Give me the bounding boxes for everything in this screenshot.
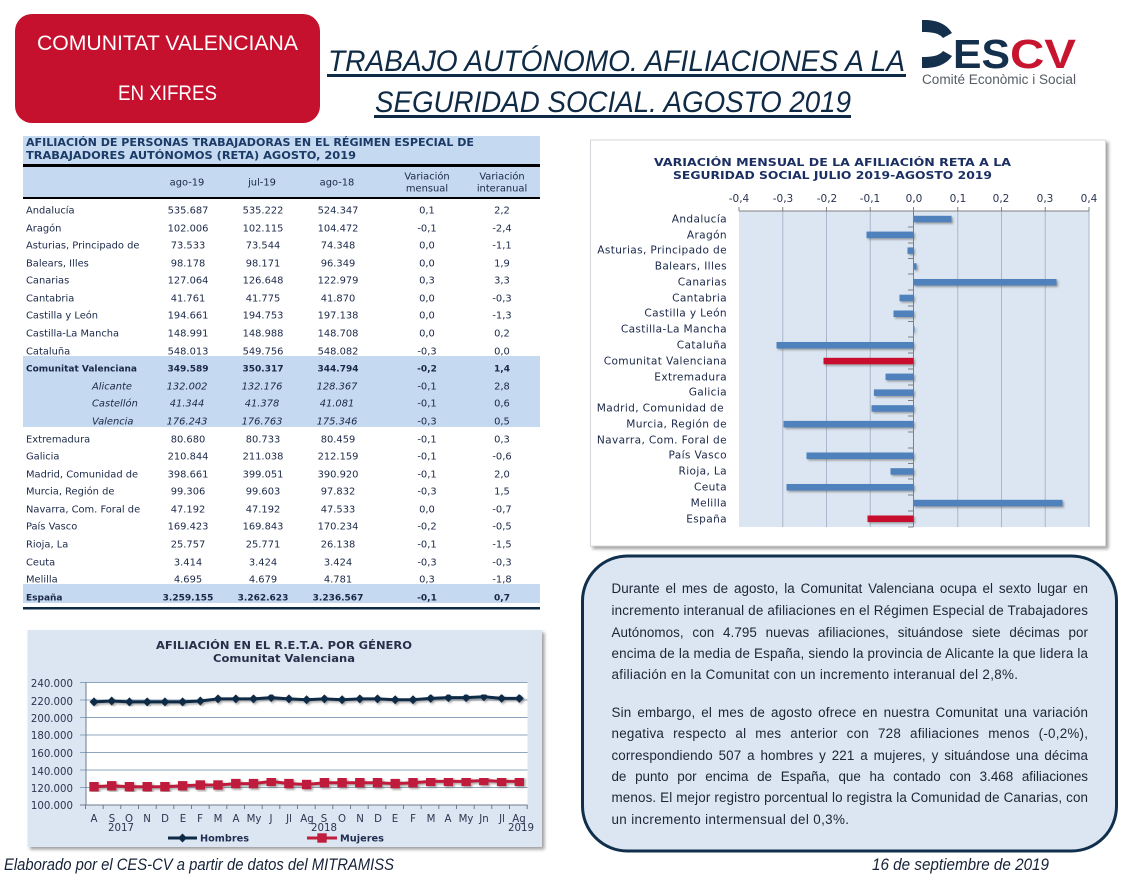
line chart plot and axes: D: [374, 814, 382, 825]
row: Castilla y León: 194.661: [168, 310, 208, 322]
row: Alicante: 2,8: [494, 382, 510, 392]
row: Rioja: 26.138: [321, 540, 355, 550]
row: Galicia: Galicia: [26, 452, 59, 462]
row: Andalucía: 535.222: [243, 206, 283, 216]
title: TRABAJO AUTÓNOMO. AFILIACIONES A LA: [328, 45, 905, 78]
row: España: [26, 594, 510, 604]
row: Valencia: [92, 416, 510, 428]
row: Navarra: 47.533: [321, 504, 355, 516]
row: Balears: 98.178: [171, 258, 205, 270]
row: Ceuta: 3.414: [174, 558, 202, 568]
bar chart axis and plot area: 0,2: [993, 193, 1009, 205]
row: Castellón: 41.378: [245, 398, 279, 410]
bar chart category labels: Melilla: [691, 498, 727, 510]
paragraph 2: de punto por encima de España, que ha contado con 3.468 afiliaciones: [612, 769, 1088, 784]
panel: line chart by gender: [28, 630, 542, 847]
row: Cantabria: [26, 294, 512, 304]
line chart plot and axes: Jn: [478, 814, 489, 825]
paragraph 2: menos. El mejor registro porcentual lo registra la Comunidad de Canarias, con: [612, 790, 1088, 805]
panel: monthly variation bar chart: [590, 140, 1106, 546]
row: Castellón: -0,1: [417, 398, 437, 410]
row: Castellón: 0,6: [494, 398, 510, 410]
paragraph 1: Autónomos, con 4.795 nuevas afiliaciones, situándose siete décimas por: [612, 625, 1089, 640]
logo: CES-CV: ES: [953, 31, 1010, 77]
row: Balears: Balears, Illes: [26, 258, 89, 270]
footer: source: Elaborado por el CES-CV a partir de datos del MITRAMISS: [4, 856, 394, 874]
line chart plot and axes: J: [268, 814, 273, 825]
title: [327, 45, 906, 119]
row: Galicia: [26, 452, 512, 462]
bar chart category labels: Extremadura: [654, 372, 727, 384]
row: Andalucía: 2,2: [494, 206, 510, 216]
row: Galicia: 210.844: [168, 452, 208, 462]
logo: CES-CV: CV: [1010, 31, 1077, 77]
bar chart axis and plot area: -0,4: [729, 193, 750, 205]
line chart plot and axes: My: [459, 814, 473, 825]
table column headers: jul-19: [247, 178, 276, 188]
row: Cataluña: 548.082: [318, 346, 358, 358]
row: Cantabria: Cantabria: [26, 294, 74, 304]
bar chart category labels: Andalucía: [672, 214, 727, 226]
row: País Vasco: 169.423: [168, 522, 208, 532]
row: Cataluña: 548.013: [168, 346, 208, 358]
row: Murcia: -0,3: [417, 486, 437, 498]
row: Rioja: [26, 540, 512, 550]
bar chart category labels: Navarra, Com. Foral de: [597, 434, 727, 446]
row: Extremadura: [26, 434, 510, 446]
table heading: [23, 136, 540, 167]
row: País Vasco: -0,2: [417, 522, 437, 532]
row: España: -0,1: [417, 594, 437, 604]
row: Castilla y León: [26, 310, 512, 322]
line chart plot and axes: M: [427, 814, 435, 825]
line chart plot and axes: 180.000: [31, 731, 73, 742]
row: Murcia: Murcia, Región de: [26, 486, 114, 498]
line chart plot and axes: S: [109, 814, 115, 825]
row: Castilla-La Mancha: 0,0: [419, 328, 435, 340]
row: País Vasco: [26, 520, 512, 532]
row: Alicante: [91, 382, 510, 392]
row: Asturias: 0,0: [419, 240, 435, 252]
row: Ceuta: [26, 558, 512, 568]
row: Andalucía: [26, 204, 510, 216]
row: Canarias: 127.064: [168, 276, 208, 286]
row: Comunitat Valenciana: 344.794: [318, 364, 358, 374]
row: Castilla y León: 197.138: [318, 310, 358, 322]
table column headers: Variación: [404, 170, 450, 182]
row: Ceuta: Ceuta: [26, 558, 55, 568]
bars highlighted: Comunitat Valenciana and España: [824, 358, 914, 522]
row: Asturias: -1,1: [492, 240, 512, 252]
bar chart category labels: Galicia: [689, 386, 727, 398]
row: Melilla: Melilla: [26, 574, 58, 586]
row: Cantabria: 41.775: [246, 294, 280, 304]
row: Melilla: 4.695: [174, 574, 202, 586]
row: Valencia: 175.346: [317, 416, 357, 428]
row: Ceuta: 3.424: [324, 558, 352, 568]
line chart plot and axes: My: [247, 814, 261, 825]
row: Melilla: [26, 574, 512, 586]
row: Rioja: 25.771: [246, 540, 280, 550]
row: Valencia: 176.243: [167, 416, 207, 428]
row: Comunitat Valenciana: 349.589: [168, 364, 208, 374]
row: Extremadura: 0,3: [494, 434, 510, 446]
row: Cantabria: 41.761: [171, 294, 205, 304]
series: Hombres: [94, 697, 519, 702]
row: Andalucía: 0,1: [419, 206, 435, 216]
row: Murcia: 99.306: [171, 486, 205, 498]
row: Murcia: 1,5: [494, 486, 510, 498]
row: Melilla: 0,3: [419, 574, 435, 586]
red badge: Comunitat Valenciana en xifres: COMUNITAT VALENCIANA: [37, 32, 298, 55]
row: Rioja: -0,1: [417, 540, 437, 550]
row: Asturias: 74.348: [321, 240, 355, 252]
row: Castellón: 41.081: [320, 398, 354, 410]
row: Murcia: 97.832: [321, 486, 355, 498]
line chart plot and axes: 200.000: [31, 714, 73, 725]
row: Galicia: 212.159: [318, 452, 358, 462]
row: Melilla: 4.781: [324, 574, 352, 586]
line chart title: AFILIACIÓN EN EL R.E.T.A. POR GÉNERO: [156, 639, 412, 652]
bar chart axis and plot area: -0,2: [817, 193, 837, 205]
line chart plot and axes: F: [410, 814, 416, 825]
logo: CES-CV: [922, 20, 1077, 87]
row: Navarra: 47.192: [171, 504, 205, 516]
row: Cataluña: Cataluña: [26, 346, 70, 358]
row: Valencia: 176.763: [242, 416, 282, 428]
row: Aragón: 102.006: [168, 224, 208, 234]
line chart plot and axes: O: [338, 814, 346, 825]
row: Murcia: [26, 486, 510, 498]
bar chart axis and plot area: [729, 193, 1098, 527]
bar chart title: VARIACIÓN MENSUAL DE LA AFILIACIÓN RETA A LA: [654, 156, 1012, 169]
row: Comunitat Valenciana: Comunitat Valenciana: [26, 364, 137, 374]
bar chart axis and plot area: 0,0: [906, 193, 922, 205]
bar chart category labels: País Vasco: [669, 450, 727, 462]
paragraph 1: afiliación en la Comunitat con un incremento interanual del 2,8%.: [612, 667, 1018, 682]
row: Cataluña: [26, 346, 510, 358]
row: País Vasco: -0,5: [492, 522, 512, 532]
row: Castilla-La Mancha: 0,2: [494, 328, 510, 340]
line chart plot and axes: Jl: [498, 814, 505, 825]
line chart title: Comunitat Valenciana: [213, 653, 355, 665]
row: Castellón: 41.344: [170, 398, 204, 410]
line chart plot and axes: D: [161, 814, 169, 825]
bar chart title: [654, 156, 1012, 182]
row: Valencia: -0,3: [417, 416, 437, 428]
red badge: Comunitat Valenciana en xifres: EN XIFRES: [118, 82, 217, 105]
row: Castilla y León: Castilla y León: [26, 310, 98, 322]
bar chart category labels: Rioja, La: [678, 466, 727, 478]
line chart plot and axes: 2019: [508, 823, 534, 834]
row: Madrid: 398.661: [168, 470, 208, 480]
bar chart category labels: Castilla-La Mancha: [621, 324, 727, 336]
row: Navarra: 47.192: [246, 504, 280, 516]
row: Navarra: Navarra, Com. Foral de: [26, 504, 140, 516]
bar chart category labels: Asturias, Principado de: [597, 244, 727, 256]
row: Castilla-La Mancha: 148.991: [168, 328, 208, 340]
row: España: 3.262.623: [238, 594, 288, 604]
row: Balears: 98.171: [246, 258, 280, 270]
table heading: TRABAJADORES AUTÓNOMOS (RETA) AGOSTO, 2019: [26, 149, 356, 162]
title: SEGURIDAD SOCIAL. AGOSTO 2019: [375, 86, 851, 119]
row: Andalucía: 535.687: [168, 206, 208, 216]
row: Ceuta: -0,3: [417, 558, 437, 568]
bar chart category labels: Cataluña: [677, 340, 727, 352]
row: Comunitat Valenciana: -0,2: [417, 364, 437, 374]
row: Castellón: [92, 398, 510, 410]
row: Madrid: Madrid, Comunidad de: [26, 470, 138, 480]
row: Alicante: 128.367: [317, 382, 358, 392]
row: Ceuta: -0,3: [492, 558, 512, 568]
row: Balears: 96.349: [321, 258, 355, 270]
line chart plot and axes: A: [91, 814, 98, 825]
row: Cantabria: 0,0: [419, 294, 435, 304]
row: Asturias: 73.533: [171, 240, 205, 252]
row: Balears: 0,0: [419, 258, 435, 270]
line chart plot and axes: O: [125, 814, 133, 825]
row: Castilla y León: 0,0: [419, 310, 435, 322]
row: España: 0,7: [494, 594, 510, 604]
paragraph 1: incremento interanual de afiliaciones en el Régimen Especial de Trabajadores: [612, 603, 1088, 618]
row: Extremadura: Extremadura: [26, 434, 90, 446]
line chart plot and axes: N: [143, 814, 151, 825]
row: País Vasco: 170.234: [318, 522, 358, 532]
bar chart category labels: Ceuta: [694, 482, 727, 494]
row: Balears: [26, 258, 510, 270]
bar chart category labels: Madrid, Comunidad de: [597, 402, 724, 414]
paragraph 2: correspondiendo 507 a hombres y 221 a mujeres, y situándose una décima: [612, 748, 1089, 763]
paragraph 2: un incremento intermensual del 0,3%.: [612, 812, 849, 827]
bar chart axis and plot area: -0,1: [860, 193, 880, 205]
row: España: 3.259.155: [163, 594, 213, 604]
row: Madrid: 2,0: [494, 470, 510, 480]
row: País Vasco: País Vasco: [26, 520, 77, 532]
paragraph 2: negativa respecto al mes anterior con 728 afiliaciones menos (-0,2%),: [612, 726, 1088, 741]
table column headers: ago-18: [320, 178, 354, 188]
row: Alicante: 132.002: [167, 382, 207, 392]
line chart plot and axes: F: [197, 814, 203, 825]
line chart plot and axes: S: [321, 814, 327, 825]
row: Valencia: 0,5: [494, 416, 510, 428]
row: Castilla y León: -1,3: [492, 310, 512, 322]
row: Navarra: [26, 504, 512, 516]
row: Castilla-La Mancha: Castilla-La Mancha: [26, 328, 119, 340]
row: Canarias: 122.979: [318, 276, 358, 286]
line chart plot and axes: Ag: [512, 814, 526, 825]
line chart plot and axes: 100.000: [31, 801, 73, 812]
row: Rioja: 25.757: [171, 540, 205, 550]
row: Valencia: Valencia: [92, 416, 133, 428]
bar chart axis and plot area: 0,1: [950, 193, 966, 205]
line chart plot and axes: N: [356, 814, 364, 825]
table heading: AFILIACIÓN DE PERSONAS TRABAJADORAS EN EL RÉGIMEN ESPECIAL DE: [26, 136, 474, 149]
line chart plot and axes: E: [180, 814, 186, 825]
line chart plot and axes: [31, 679, 534, 834]
row: Comunitat Valenciana: 1,4: [494, 364, 510, 374]
bar chart category labels: Castilla y León: [644, 308, 727, 320]
row: Extremadura: 80.733: [246, 434, 280, 446]
paragraph 2: Sin embargo, el mes de agosto ofrece en nuestra Comunitat una variación: [612, 705, 1088, 720]
table column headers: ago-19: [170, 178, 204, 188]
bar chart category labels: [597, 214, 727, 526]
row: Canarias: 3,3: [494, 276, 510, 286]
bar chart category labels: Aragón: [687, 230, 727, 242]
panel: commentary text: [582, 556, 1116, 851]
row: Canarias: 0,3: [419, 276, 435, 286]
paragraph 2: [612, 705, 1089, 827]
row: Murcia: 99.603: [246, 486, 280, 498]
line chart plot and axes: A: [445, 814, 452, 825]
row: Extremadura: 80.459: [321, 434, 355, 446]
bar chart axis and plot area: 0,4: [1081, 193, 1098, 205]
row: Alicante: 132.176: [242, 382, 282, 392]
row: Canarias: 126.648: [243, 276, 283, 286]
row: Cantabria: 41.870: [321, 294, 355, 304]
line chart plot and axes: 220.000: [31, 697, 73, 708]
line chart title: [156, 639, 412, 665]
row: Castilla-La Mancha: [26, 328, 510, 340]
row: Rioja: Rioja, La: [26, 540, 68, 550]
line chart plot and axes: 240.000: [31, 679, 73, 690]
row: País Vasco: 169.843: [243, 522, 283, 532]
row: Madrid: -0,1: [417, 470, 437, 480]
row: Castilla-La Mancha: 148.708: [318, 328, 358, 340]
row: España: 3.236.567: [313, 594, 363, 604]
legend: Mujeres: [340, 834, 384, 844]
line chart plot and axes: 120.000: [31, 784, 73, 795]
line chart plot and axes: A: [233, 814, 240, 825]
row: Castilla y León: 194.753: [243, 310, 283, 322]
paragraph 1: Durante el mes de agosto, la Comunitat Valenciana ocupa el sexto lugar en: [612, 581, 1088, 596]
row: Melilla: 4.679: [249, 574, 277, 586]
row: Aragón: [26, 222, 512, 234]
series: Mujeres: [94, 780, 519, 787]
bar chart category labels: Comunitat Valenciana: [604, 356, 727, 368]
row: Madrid: 390.920: [318, 470, 358, 480]
row: Canarias: [26, 276, 510, 286]
bar chart axis and plot area: -0,3: [773, 193, 793, 205]
row: Asturias: [26, 240, 512, 252]
row: Asturias: 73.544: [246, 240, 280, 252]
row: Extremadura: 80.680: [171, 434, 205, 446]
legend: Hombres: [200, 834, 249, 844]
row: Comunitat Valenciana: [26, 364, 510, 374]
row: Aragón: -2,4: [492, 224, 512, 234]
line chart plot and axes: 2018: [311, 823, 337, 834]
row: Galicia: -0,1: [417, 452, 437, 462]
footer: date: 16 de septiembre de 2019: [872, 856, 1049, 874]
row: Canarias: Canarias: [26, 276, 69, 286]
row: Comunitat Valenciana: 350.317: [242, 364, 284, 374]
row: Rioja: -1,5: [492, 540, 512, 550]
table column headers: [23, 167, 540, 199]
row: Balears: 1,9: [494, 258, 510, 270]
row: Castilla-La Mancha: 148.988: [243, 328, 283, 340]
highlight band: Comunitat Valenciana: [23, 356, 540, 427]
row: Navarra: 0,0: [419, 504, 435, 516]
highlight band: España: [23, 584, 540, 603]
row: Asturias: Asturias, Principado de: [26, 240, 139, 252]
bar chart axis and plot area: 0,3: [1037, 193, 1053, 205]
red badge: Comunitat Valenciana en xifres: [15, 14, 320, 123]
paragraph 1: encima de la media de España, siendo la provincia de Alicante la que lidera la: [612, 646, 1089, 661]
legend: [168, 834, 384, 844]
row: Andalucía: 524.347: [318, 206, 358, 216]
line chart plot and axes: 2017: [108, 823, 134, 834]
paragraph 1: [612, 581, 1089, 682]
row: Cataluña: 549.756: [243, 346, 283, 358]
bar chart category labels: Canarias: [678, 276, 727, 288]
table bottom rule: [23, 607, 540, 610]
line chart plot and axes: Jl: [285, 814, 292, 825]
row: Madrid: 399.051: [243, 470, 283, 480]
row: Aragón: 104.472: [318, 224, 358, 234]
row: Cataluña: -0,3: [417, 346, 437, 358]
line chart plot and axes: 140.000: [31, 767, 73, 778]
row: Andalucía: Andalucía: [26, 204, 75, 216]
bars: regions: [776, 216, 1062, 506]
bar chart category labels: Murcia, Región de: [626, 418, 727, 430]
table column headers: interanual: [477, 184, 527, 194]
row: Melilla: -1,8: [492, 574, 512, 586]
row: Alicante: Alicante: [91, 382, 132, 392]
row: Aragón: Aragón: [26, 222, 61, 234]
row: Alicante: -0,1: [417, 382, 437, 392]
row: Cataluña: 0,0: [494, 346, 510, 358]
line chart plot and axes: E: [392, 814, 398, 825]
table: RETA affiliation by region: [23, 136, 540, 610]
row: Castellón: Castellón: [92, 398, 138, 410]
row: Navarra: -0,7: [492, 504, 512, 516]
row: Aragón: 102.115: [243, 224, 283, 234]
logo: CES-CV: Comité Econòmic i Social: [922, 72, 1076, 87]
table column headers: Variación: [479, 170, 525, 182]
row: Madrid: [26, 470, 510, 480]
line chart plot and axes: 160.000: [31, 749, 73, 760]
bar chart category labels: España: [686, 514, 727, 526]
bar chart category labels: Balears, Illes: [655, 260, 727, 272]
line chart plot and axes: Ag: [300, 814, 314, 825]
row: Extremadura: -0,1: [417, 434, 437, 446]
bar chart title: SEGURIDAD SOCIAL JULIO 2019-AGOSTO 2019: [673, 170, 992, 182]
row: Galicia: -0,6: [492, 452, 512, 462]
line chart plot and axes: M: [214, 814, 222, 825]
row: Aragón: -0,1: [417, 224, 437, 234]
bar chart category labels: Cantabria: [672, 292, 727, 304]
row: Galicia: 211.038: [243, 452, 283, 462]
row: Cantabria: -0,3: [492, 294, 512, 304]
row: Ceuta: 3.424: [249, 558, 277, 568]
row: España: España: [26, 594, 63, 604]
table column headers: mensual: [406, 184, 448, 194]
